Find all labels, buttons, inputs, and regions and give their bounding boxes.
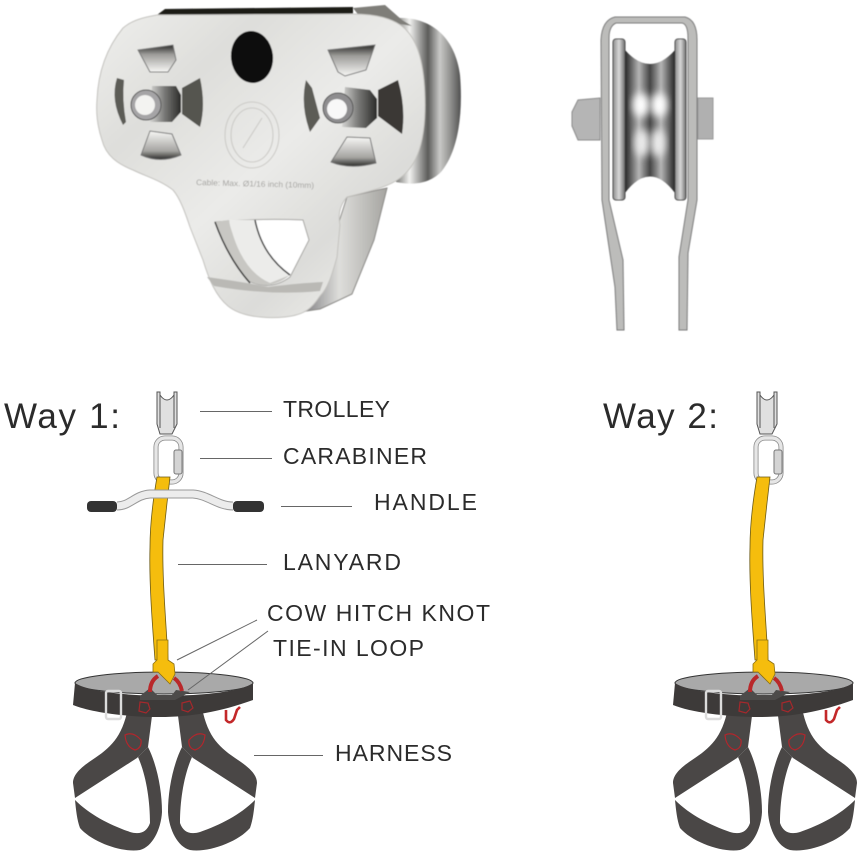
trolley: [757, 392, 777, 434]
heading: way 1: Way 1:: [4, 397, 120, 436]
right bolt and nut: [323, 87, 377, 128]
cow hitch knot: [153, 640, 175, 684]
label: harness: HARNESS: [335, 740, 452, 766]
lanyard: [150, 477, 170, 660]
wheel flanges: [613, 39, 625, 200]
harness: [673, 640, 857, 850]
carabiner: [156, 438, 182, 482]
tie-in loop: [150, 676, 182, 692]
heading: way 2: Way 2:: [603, 397, 718, 436]
way 1 diagram: [73, 392, 264, 850]
left leg loop: [673, 708, 762, 850]
side view of pulley: [572, 17, 713, 330]
top edge of rear plate: [157, 7, 353, 15]
left leg loop: [73, 708, 162, 850]
harness: [73, 640, 257, 850]
label: lanyard: LANYARD: [283, 549, 401, 575]
lanyard: [750, 477, 770, 660]
pulley wheel behind plate: [395, 18, 461, 184]
right leg loop: [768, 708, 857, 850]
left fastener windows: [115, 45, 203, 160]
right leg loop: [168, 708, 257, 850]
handle: [87, 494, 264, 512]
label: handle: HANDLE: [374, 489, 477, 515]
belt top: [75, 672, 253, 694]
carabiner: [756, 438, 782, 482]
belt band: [73, 683, 253, 717]
rear plate lower fold: [300, 188, 387, 312]
red gear loop: [226, 707, 240, 722]
triangular carabiner opening: [215, 219, 309, 285]
belt centre straps: [140, 688, 190, 700]
belt centre straps: [740, 688, 790, 700]
buckle: [106, 691, 121, 719]
cow hitch knot: [753, 640, 775, 684]
fold highlight: [207, 277, 323, 293]
belt stitching: [139, 701, 193, 713]
side plate frame: [601, 17, 697, 330]
left nut: [572, 98, 600, 140]
right nut: [698, 98, 713, 139]
buckle: [706, 691, 721, 719]
label: cow hitch knot: COW HITCH KNOT: [267, 600, 490, 626]
engraved cable specification: Cable: Max. Ø1/16 inch (10mm): [196, 178, 314, 190]
leader lines: [177, 412, 352, 756]
way 2 diagram: [673, 392, 857, 850]
belt band: [673, 683, 853, 717]
front view of double pulley trolley: [97, 5, 461, 318]
wheel groove: [625, 50, 675, 193]
tie-in loop: [750, 676, 782, 692]
left bolt and nut: [131, 86, 181, 122]
engraved logo: [225, 102, 279, 168]
belt stitching: [739, 701, 793, 713]
right fastener windows: [304, 45, 403, 166]
label: tie-in loop: TIE-IN LOOP: [273, 635, 424, 661]
label: carabiner: CARABINER: [283, 443, 427, 469]
centre hole: [228, 29, 276, 85]
trolley: [157, 392, 177, 434]
label: trolley: TROLLEY: [283, 396, 390, 422]
red gear loop: [826, 707, 840, 722]
belt top: [675, 672, 853, 694]
main plate: [97, 14, 425, 318]
